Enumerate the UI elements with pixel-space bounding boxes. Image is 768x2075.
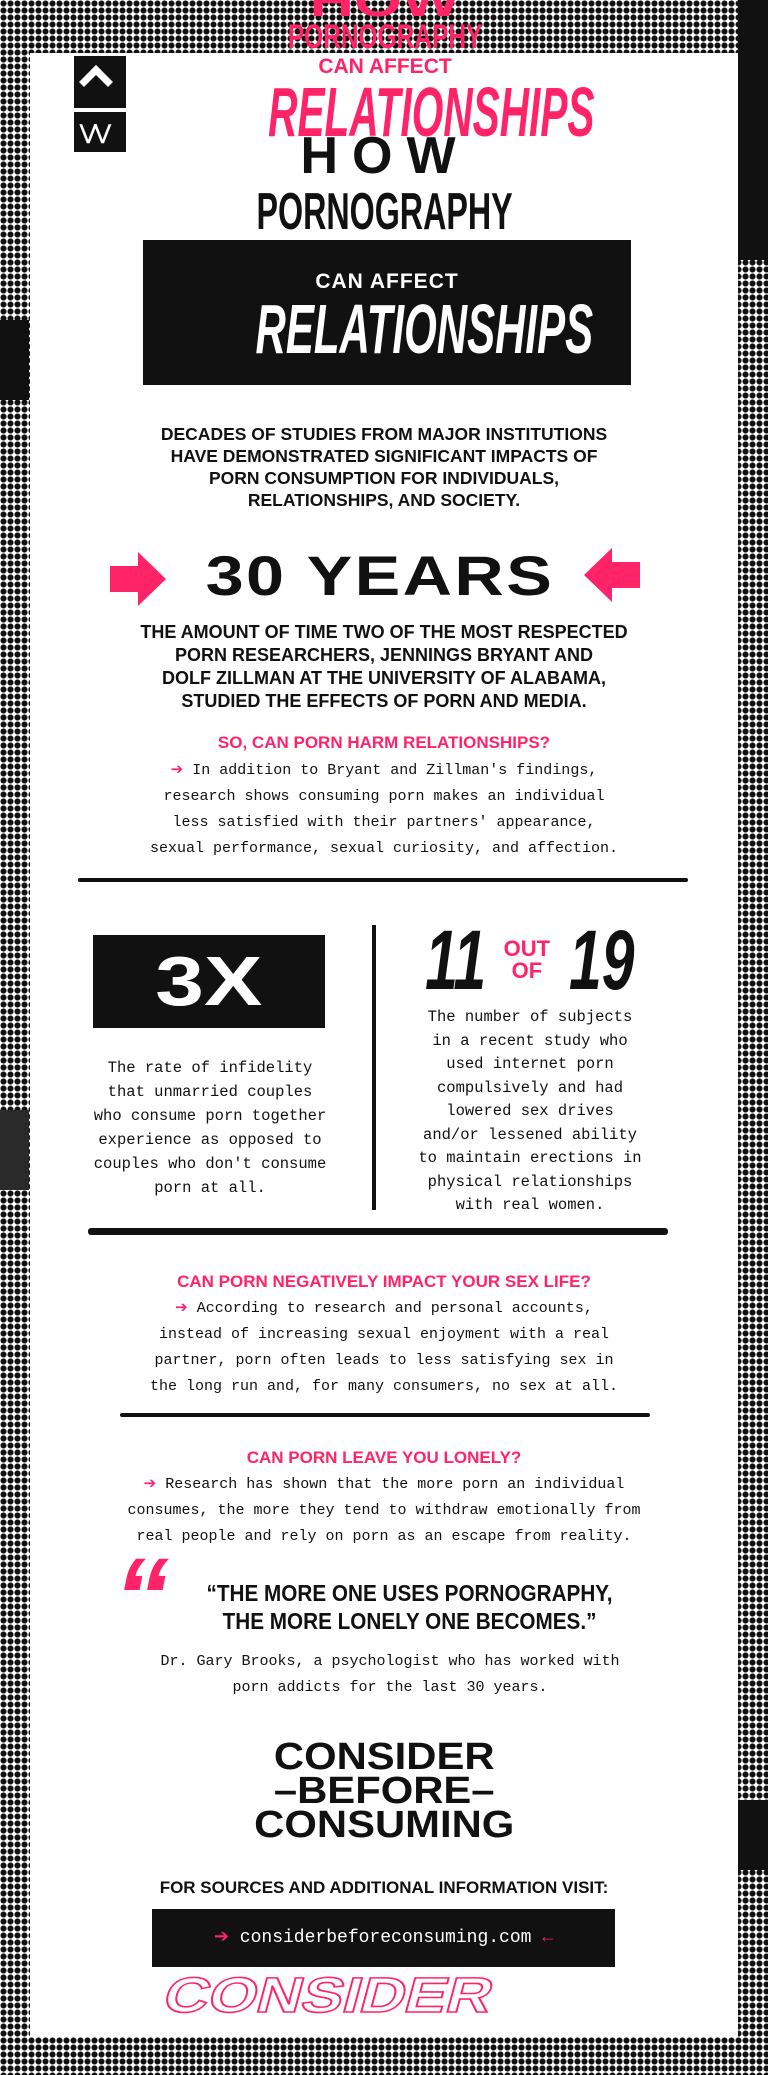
pink title echo: [268, 0, 594, 151]
title box: CAN AFFECT RELATIONSHIPS: RELATIONSHIPS: [256, 290, 593, 368]
stat: 11 out of 19: 19: [569, 913, 634, 1007]
stat: 11 out of 19: in a recent study who: [432, 1032, 628, 1050]
section: lonely: [127, 1448, 641, 1545]
stat: 3X: experience as opposed to: [98, 1131, 322, 1149]
logo: consider before consuming: –BEFORE–: [274, 1770, 494, 1812]
30 years description: THE AMOUNT OF TIME TWO OF THE MOST RESPECTED: [140, 622, 628, 642]
30 years description: STUDIED THE EFFECTS OF PORN AND MEDIA.: [181, 691, 587, 711]
30 years with arrows: [110, 544, 640, 607]
pink title echo: PORNOGRAPHY: [288, 18, 482, 56]
logo: consider before consuming: CONSUMING: [254, 1804, 514, 1846]
quote: [114, 1536, 620, 1696]
pink title echo: RELATIONSHIPS: [268, 73, 594, 151]
stat: 11 out of 19: OF: [512, 958, 542, 983]
url box: ➔ considerbeforeconsuming.com ←: [214, 1928, 553, 1948]
title box: CAN AFFECT RELATIONSHIPS: CAN AFFECT: [315, 270, 459, 293]
quote: THE MORE LONELY ONE BECOMES.”: [223, 1608, 597, 1634]
section: harm relationships: less satisfied with their partners' appearance,: [172, 814, 596, 831]
stat: 3X: couples who don't consume: [94, 1155, 326, 1173]
intro text: HAVE DEMONSTRATED SIGNIFICANT IMPACTS OF: [171, 446, 597, 466]
stat: 11 out of 19: The number of subjects: [428, 1008, 632, 1026]
30 years description: PORN RESEARCHERS, JENNINGS BRYANT AND: [175, 645, 593, 665]
stat: 11 out of 19: [418, 913, 642, 1214]
url box: [152, 1909, 615, 1967]
title: HOW PORNOGRAPHY: PORNOGRAPHY: [257, 183, 513, 241]
section: harm relationships: ➔ In addition to Bryant and Zillman's findings,: [171, 762, 597, 779]
icon: arrow right: [110, 552, 166, 606]
stat: 3X: that unmarried couples: [108, 1083, 312, 1101]
intro text: DECADES OF STUDIES FROM MAJOR INSTITUTIONS: [161, 424, 607, 444]
section: sex life: the long run and, for many consumers, no sex at all.: [150, 1378, 618, 1395]
title: HOW PORNOGRAPHY: [257, 127, 513, 241]
stat: 11 out of 19: used internet porn: [446, 1055, 614, 1073]
quote: “THE MORE ONE USES PORNOGRAPHY,: [207, 1580, 613, 1606]
section: sex life: instead of increasing sexual enjoyment with a real: [159, 1326, 609, 1343]
logo: consider before consuming: CONSIDER: [274, 1736, 494, 1778]
section: harm relationships: SO, CAN PORN HARM RELATIONSHIPS?: [218, 733, 550, 752]
icon: quote marks: “: [114, 1536, 169, 1659]
text: porn at all.: [154, 1179, 266, 1197]
heading: 30 years: 30 YEARS: [206, 544, 554, 607]
pink title echo: CAN AFFECT: [318, 55, 452, 78]
section: sex life: [150, 1272, 618, 1395]
title: HOW PORNOGRAPHY: HOW: [300, 127, 470, 185]
stat: 3X: who consume porn together: [94, 1107, 326, 1125]
quote: Dr. Gary Brooks, a psychologist who has worked with: [160, 1653, 620, 1670]
30 years description: DOLF ZILLMAN AT THE UNIVERSITY OF ALABAMA,: [162, 668, 606, 688]
icon: arrow left: [584, 548, 640, 602]
intro text: PORN CONSUMPTION FOR INDIVIDUALS,: [209, 468, 559, 488]
logo: ⋁⋁: [80, 122, 109, 144]
stat: 11 out of 19: to maintain erections in: [418, 1149, 642, 1167]
stat: 11 out of 19: 11: [425, 913, 486, 1007]
stat: 11 out of 19: OUT: [504, 936, 550, 961]
section: harm relationships: sexual performance, sexual curiosity, and affection.: [150, 840, 618, 857]
stat: 3X: [93, 935, 326, 1197]
section: harm relationships: research shows consuming porn makes an individual: [163, 788, 605, 805]
section: lonely: real people and rely on porn as an escape from reality.: [136, 1528, 632, 1545]
section: lonely: consumes, the more they tend to withdraw emotionally from: [127, 1502, 641, 1519]
30 years description: [140, 622, 628, 711]
section: sex life: CAN PORN NEGATIVELY IMPACT YOUR SEX LIFE?: [177, 1272, 591, 1291]
sources heading: FOR SOURCES AND ADDITIONAL INFORMATION VISIT:: [160, 1878, 608, 1897]
title box: CAN AFFECT RELATIONSHIPS: [143, 240, 631, 385]
quote: porn addicts for the last 30 years.: [232, 1679, 548, 1696]
stat: 11 out of 19: physical relationships: [428, 1172, 632, 1190]
stat: 11 out of 19: lowered sex drives: [446, 1102, 614, 1120]
section: sex life: ➔ According to research and personal accounts,: [175, 1300, 593, 1317]
stat: 11 out of 19: compulsively and had: [437, 1078, 623, 1096]
background blocks: [738, 0, 768, 260]
section: lonely: CAN PORN LEAVE YOU LONELY?: [247, 1448, 521, 1467]
logo: [74, 56, 126, 152]
stat: 11 out of 19: with real women.: [456, 1196, 604, 1214]
intro text: RELATIONSHIPS, AND SOCIETY.: [248, 490, 520, 510]
stat: 11 out of 19: and/or lessened ability: [423, 1126, 637, 1144]
section: lonely: ➔ Research has shown that the more porn an individual: [144, 1476, 624, 1493]
stat: 3X: The rate of infidelity: [108, 1059, 312, 1077]
section: harm relationships: [150, 733, 618, 857]
intro text: [161, 424, 607, 510]
section: sex life: partner, porn often leads to less satisfying sex in: [154, 1352, 614, 1369]
logo: consider before consuming: [254, 1736, 514, 1846]
stat: 3X: 3X: [155, 942, 263, 1020]
